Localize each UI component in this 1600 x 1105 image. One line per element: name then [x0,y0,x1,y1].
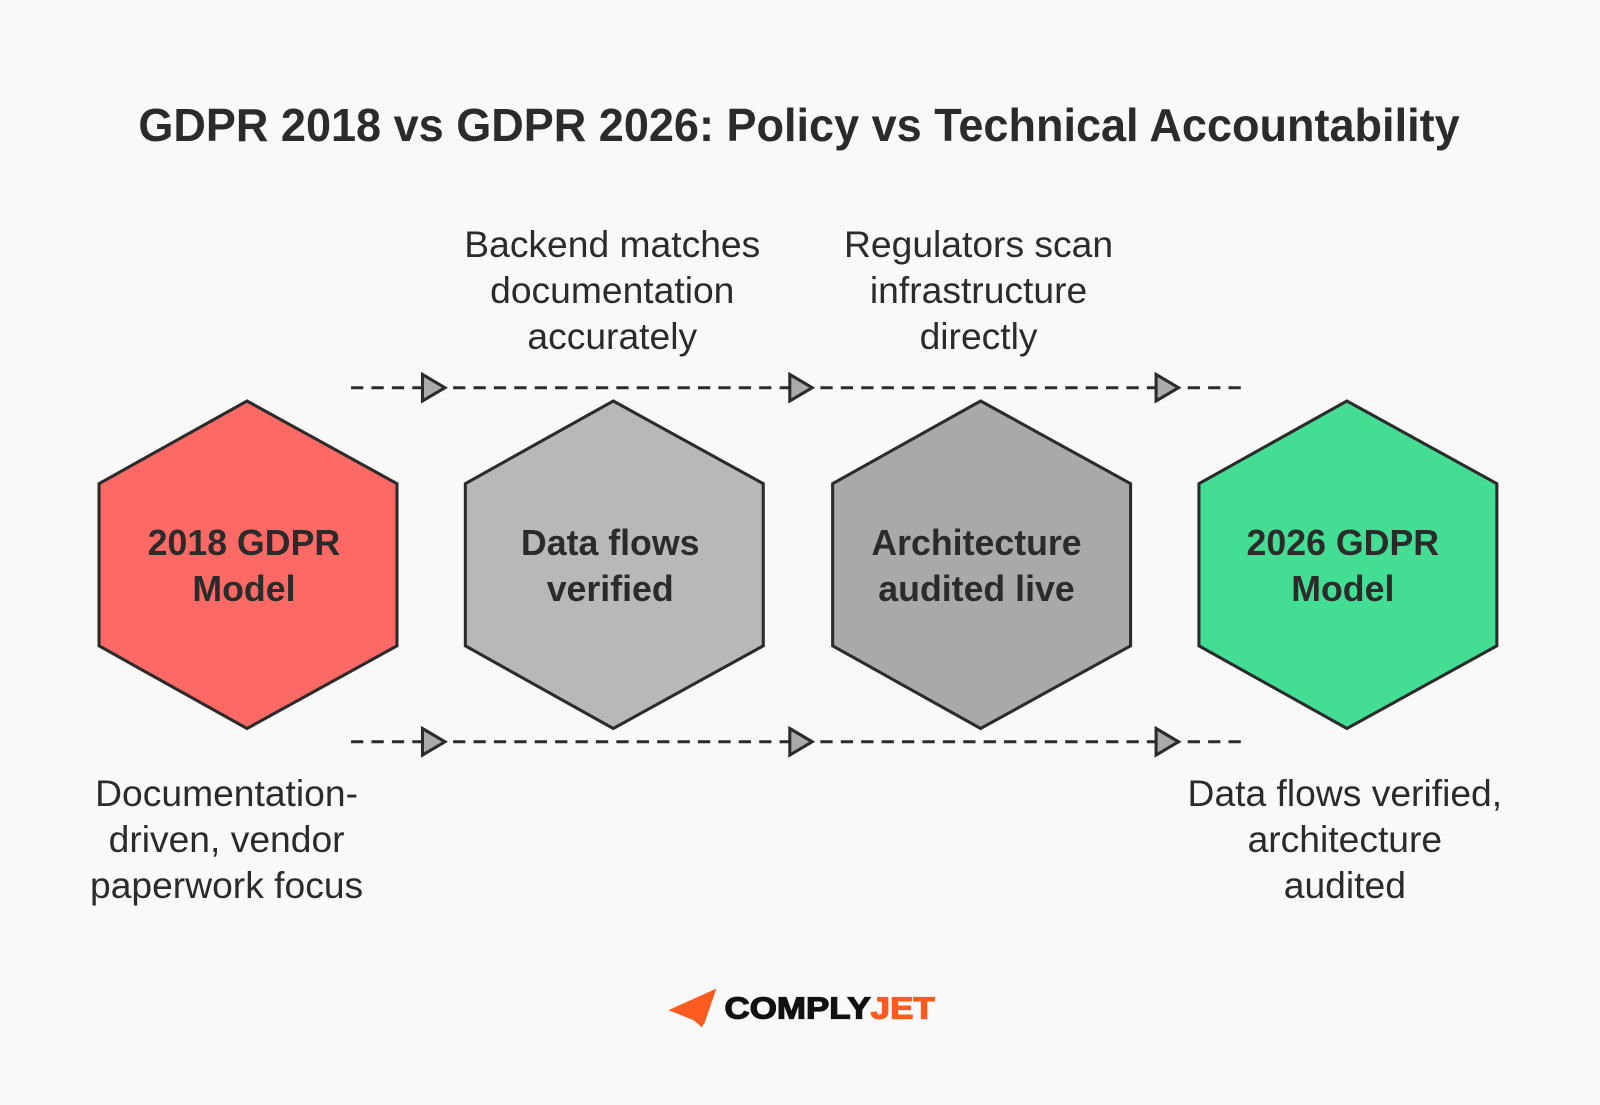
text: backend matches documentation: accurately [527,315,697,357]
text: 2026 description: audited [1284,864,1406,906]
hexagon: 2026 GDPR Model [1199,401,1497,729]
hexagon: 2018 GDPR Model [99,401,397,729]
logo: ComplyJet: COMPLY JET [724,991,935,1025]
text: 2018 description: paperwork focus [90,864,363,906]
icon: paper plane [668,989,716,1027]
text: regulators scan infrastructure: Regulators scan [844,223,1113,265]
hexagon: Architecture audited live [833,401,1131,729]
text: 2026 description: Data flows verified, [1188,772,1502,814]
title: GDPR 2018 vs GDPR 2026: Policy vs Technical Accountability [138,99,1460,151]
text: 2018 description [90,772,363,906]
hexagon: 2026 GDPR Model: Model [1291,569,1394,609]
text: regulators scan infrastructure: directly [920,315,1038,357]
hexagon: Data flows verified: verified [547,569,674,609]
text: 2026 description [1188,772,1502,906]
hexagon: Architecture audited live: Architecture [871,523,1082,563]
text: backend matches documentation: documentation [490,269,734,311]
hexagon: Data flows verified: Data flows [521,523,700,563]
arrow: top dashed flow [351,374,1247,401]
hexagon: Data flows verified [465,401,763,729]
hexagon: 2026 GDPR Model: 2026 GDPR [1247,523,1439,563]
text: 2026 description: architecture [1248,818,1442,860]
text: backend matches documentation: Backend matches [464,223,760,265]
hexagon: Architecture audited live: audited live [878,569,1075,609]
text: 2018 description: Documentation- [95,772,358,814]
text: regulators scan infrastructure: infrastructure [870,269,1087,311]
text: backend matches documentation [464,223,760,357]
logo: ComplyJet [668,989,935,1027]
text: 2018 description: driven, vendor [109,818,345,860]
hexagon: 2018 GDPR Model: 2018 GDPR [148,523,340,563]
arrow: bottom dashed flow [351,729,1247,755]
hexagon: 2018 GDPR Model: Model [192,569,295,609]
text: regulators scan infrastructure [844,223,1113,357]
